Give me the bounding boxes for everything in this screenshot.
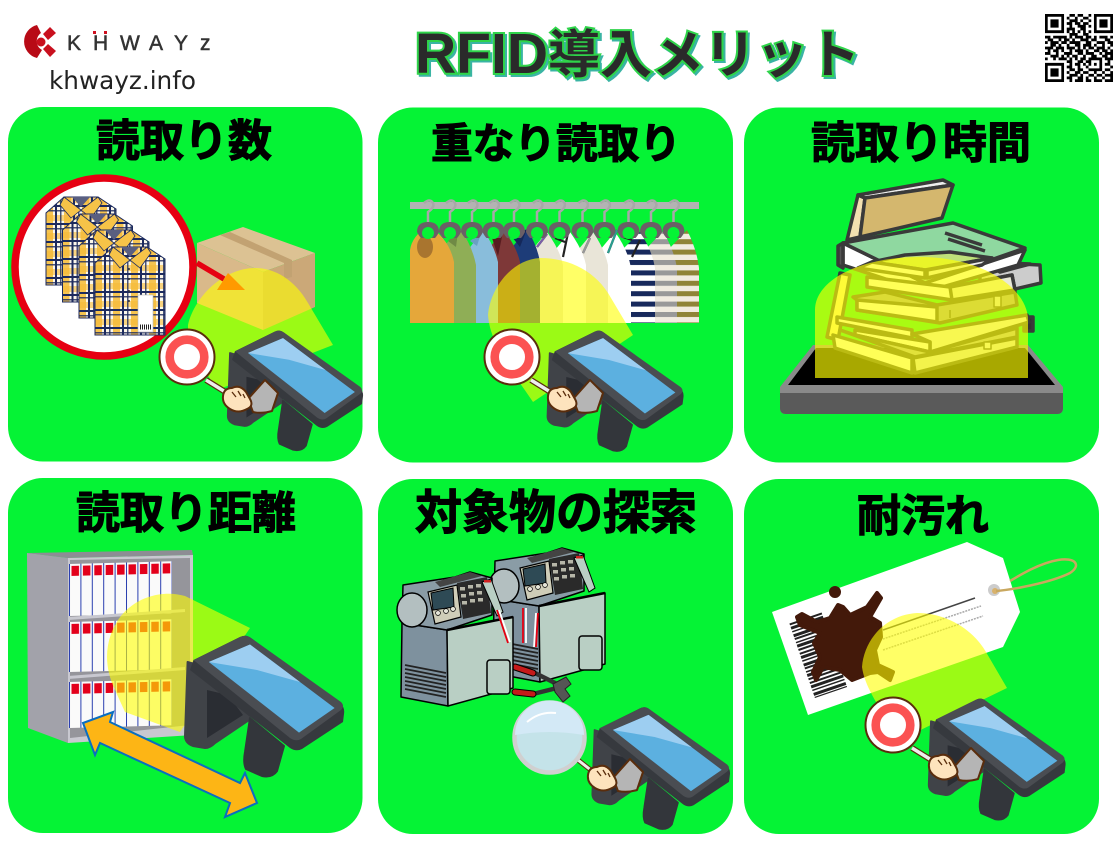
pliers [515, 667, 571, 702]
cardboard box [197, 227, 315, 330]
heading: read time: 読取り時間 [811, 119, 1031, 168]
panel: read count [8, 107, 363, 462]
arrow: read distance [83, 712, 257, 817]
panel: read distance [8, 478, 362, 833]
callout: shirts with tags [15, 178, 193, 356]
shelf with binders [27, 550, 193, 743]
ink stain [797, 588, 893, 680]
reader beam [862, 613, 1007, 740]
scanner [228, 331, 363, 450]
heading: read distance: 読取り距離 [76, 489, 296, 538]
hand [588, 759, 643, 792]
scanner [185, 636, 344, 776]
logo wordmark: KHWAYz [67, 32, 210, 55]
hand holding OK sign [866, 698, 984, 781]
heading: stain resistance: 耐汚れ [857, 492, 989, 541]
hanging clothes [410, 200, 699, 323]
heading: locating target objects: 対象物の探索 [415, 486, 697, 539]
panel: overlapping read [378, 108, 733, 462]
scanner [592, 707, 730, 829]
title: RFID導入メリット [415, 22, 860, 86]
clothes rail [410, 202, 699, 209]
logo [24, 25, 210, 95]
tray reader [780, 345, 1063, 414]
website: khwayz.info [49, 66, 196, 95]
reader beam [488, 258, 633, 402]
arrow: zoom pointer [197, 263, 245, 290]
reader beam [815, 257, 1028, 378]
panel: stain resistance [744, 479, 1099, 834]
icon: logo mark [24, 25, 56, 58]
front machine [397, 572, 513, 706]
hand holding OK sign [160, 330, 278, 413]
heading: overlapping read: 重なり読取り [431, 120, 681, 167]
hand holding OK sign [484, 330, 603, 413]
panel: locating target objects [378, 479, 733, 834]
heading: read count: 読取り数 [96, 117, 272, 166]
cut seal strips [497, 608, 538, 647]
reader beam [188, 268, 333, 390]
price tag [772, 542, 1076, 715]
rear machine [489, 548, 605, 682]
QR code [1045, 15, 1113, 81]
panel: read time [744, 108, 1099, 462]
magnifier [514, 701, 592, 772]
reader beam [107, 594, 250, 732]
stack of books [827, 180, 1041, 373]
scanner [929, 699, 1066, 820]
logo red dots [93, 31, 107, 34]
scanner [547, 331, 684, 451]
